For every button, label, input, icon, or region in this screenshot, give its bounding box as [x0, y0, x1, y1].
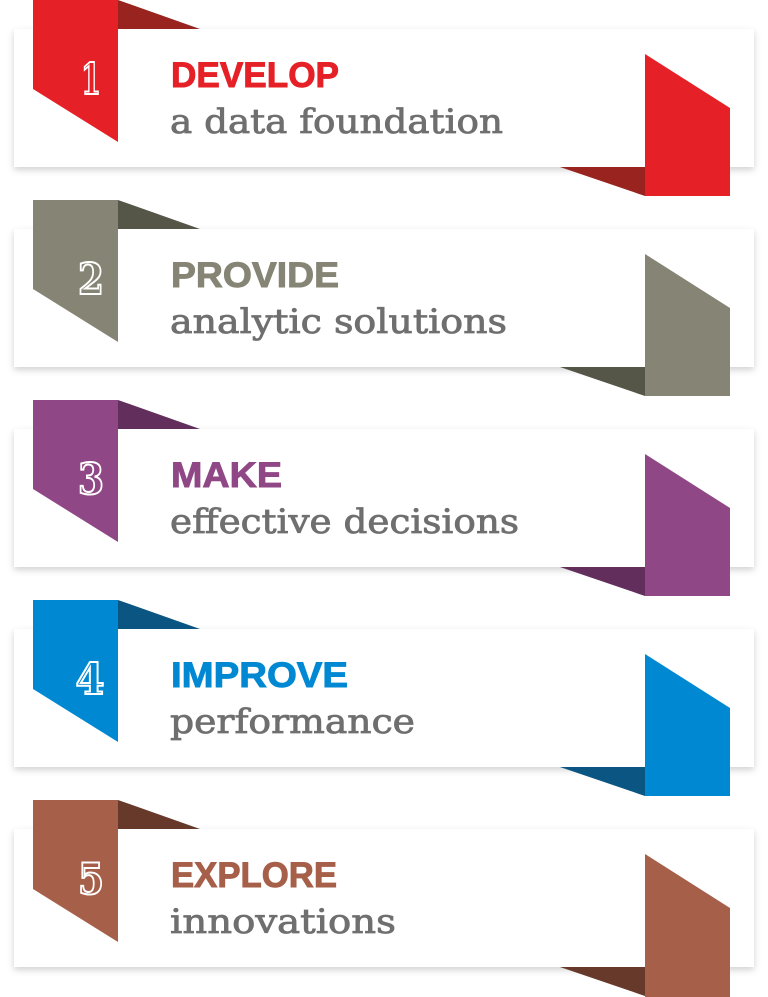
- heading: IMPROVE: IMPROVE: [171, 656, 348, 695]
- text: performance: performance: [170, 702, 415, 742]
- heading: PROVIDE: PROVIDE: [171, 256, 339, 295]
- ribbon right 1: [645, 54, 730, 196]
- ribbon left 2: [33, 200, 118, 342]
- number 5: 5: [78, 855, 104, 905]
- ribbon right 5: [645, 854, 730, 997]
- card 5: [14, 829, 754, 967]
- ribbon fold top 1: [118, 0, 200, 29]
- ribbon fold top 2: [118, 200, 200, 229]
- ribbon fold bottom 3: [560, 567, 645, 596]
- ribbon fold bottom 5: [560, 967, 645, 996]
- card 2: [14, 229, 754, 367]
- ribbon left 5: [33, 800, 118, 942]
- number 4: 4: [76, 655, 104, 705]
- ribbon fold top 4: [118, 600, 200, 629]
- ribbon right 2: [645, 254, 730, 396]
- heading: MAKE: MAKE: [171, 456, 282, 495]
- ribbon fold bottom 1: [560, 167, 645, 196]
- text: analytic solutions: analytic solutions: [170, 302, 507, 342]
- ribbon left 3: [33, 400, 118, 542]
- ribbon right 3: [645, 454, 730, 596]
- panel: step 5 explore: [14, 800, 754, 997]
- text: effective decisions: effective decisions: [170, 502, 519, 542]
- panel: step 4 improve: [14, 600, 754, 796]
- ribbon left 1: [33, 0, 118, 142]
- panel: step 3 make: [14, 400, 754, 596]
- heading: EXPLORE: EXPLORE: [171, 856, 337, 895]
- panel: step 1 develop: [14, 0, 754, 196]
- ribbon fold top 5: [118, 800, 200, 829]
- heading: DEVELOP: DEVELOP: [171, 56, 339, 95]
- panel: step 2 provide: [14, 200, 754, 396]
- ribbon fold bottom 2: [560, 367, 645, 396]
- card 4: [14, 629, 754, 767]
- ribbon right 4: [645, 654, 730, 796]
- card 3: [14, 429, 754, 567]
- text: a data foundation: a data foundation: [170, 102, 503, 142]
- text: innovations: innovations: [170, 902, 396, 942]
- ribbon fold bottom 4: [560, 767, 645, 796]
- ribbon left 4: [33, 600, 118, 742]
- number 2: 2: [78, 255, 104, 305]
- number 3: 3: [78, 455, 104, 505]
- number 1: 1: [81, 55, 101, 105]
- ribbon fold top 3: [118, 400, 200, 429]
- card 1: [14, 29, 754, 167]
